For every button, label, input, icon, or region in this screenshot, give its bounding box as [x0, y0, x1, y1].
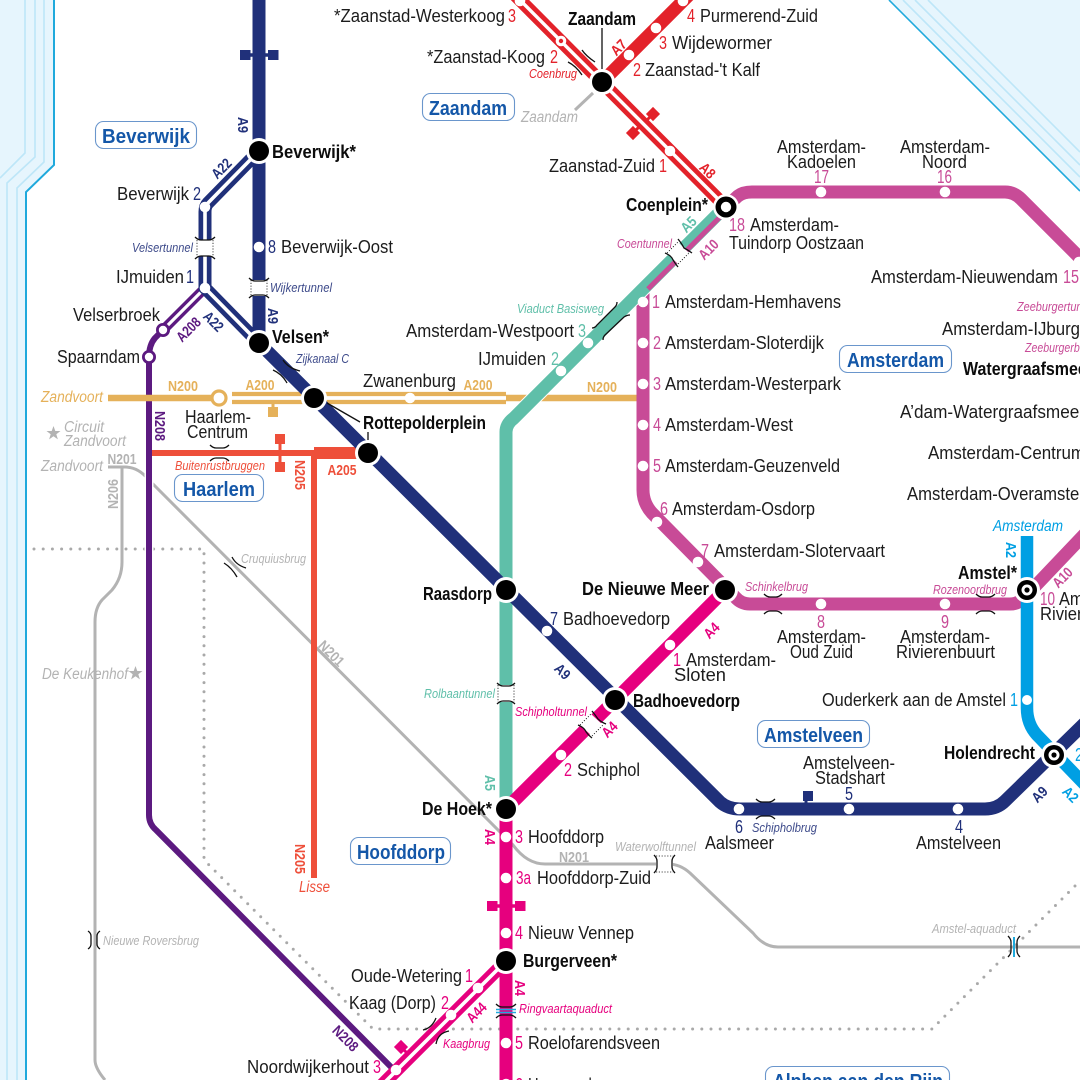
Cruquiusbrug: [224, 557, 246, 577]
structure and destination labels: Schipholtunnel: [515, 705, 588, 719]
aquaduct water lines: [496, 937, 1014, 1012]
junction labels: Beverwijk*: [272, 142, 356, 162]
road number labels: N205: [291, 460, 307, 490]
road number labels: A9: [1029, 784, 1051, 806]
structure and destination labels: Circuit: [64, 419, 105, 436]
exit numbers pink: 8: [817, 612, 825, 632]
A44 stations: [391, 983, 483, 1075]
exit numbers green and blue: 2: [551, 349, 559, 369]
structure and destination labels: Wijkertunnel: [270, 281, 333, 295]
road number labels: A4: [481, 829, 497, 845]
road number labels: A9: [264, 308, 280, 324]
exit numbers magenta: 3a: [516, 868, 532, 888]
exit names: Amsterdam-Hemhavens: [665, 292, 841, 312]
leader lines: [327, 28, 602, 443]
junction labels: Holendrecht: [944, 743, 1035, 763]
exit names: *Zaanstad-Westerkoog: [334, 6, 505, 26]
structure and destination labels: Viaduct Basisweg: [517, 302, 604, 316]
city: Hoofddorp: Hoofddorp: [357, 841, 445, 864]
structure and destination labels: Coentunnel: [617, 237, 673, 251]
exit names: Kadoelen: [787, 152, 856, 172]
junction Rottepolderplein: [355, 440, 381, 466]
road number labels: A9: [234, 117, 250, 133]
exit names: IJmuiden: [116, 267, 184, 287]
road number labels: A10: [1050, 565, 1077, 592]
road number labels: N200: [168, 379, 198, 395]
exit numbers pink: 4: [653, 415, 661, 435]
road N201: [108, 467, 1080, 947]
exit names: Amsterdam-Nieuwendam: [871, 267, 1058, 287]
city: Alphen aan den Rijn: [766, 1066, 950, 1080]
exit names: Haarlem-: [185, 407, 251, 427]
road number labels: N208: [329, 1023, 361, 1055]
exit names: Amsterdam-: [900, 137, 990, 157]
road A7 red: [602, 0, 690, 82]
road number labels: A5: [678, 214, 700, 236]
exit names: Tuindorp Oostzaan: [729, 233, 864, 253]
structure and destination labels: Waterwolftunnel: [615, 840, 697, 854]
Waterwolftunnel: [654, 855, 675, 873]
exit numbers pink: 1: [652, 292, 660, 312]
structure and destination labels: Rolbaantunnel: [424, 687, 496, 701]
Zijkanaal C: [273, 360, 300, 383]
exit numbers magenta: 3: [515, 827, 523, 847]
exit names: Amsterdam-West: [665, 415, 793, 435]
structure and destination labels: Zaandam: [520, 109, 578, 126]
road number labels: N201: [108, 452, 136, 468]
structure and destination labels: Buitenrustbruggen: [175, 459, 265, 473]
exit names: Amsterdam-: [777, 137, 866, 157]
structure and destination labels: Zandvoort: [40, 458, 104, 475]
structure and destination labels: Amstel-aquaduct: [931, 922, 1016, 936]
city: Amstelveen: Amstelveen: [764, 724, 863, 747]
road number labels: N201: [559, 850, 589, 866]
exit numbers red: 3: [659, 33, 667, 53]
exit numbers magenta: 1: [465, 966, 473, 986]
Kaagbrug: [423, 1018, 449, 1044]
exit names: Badhoevedorp: [563, 609, 670, 629]
Rolbaantunnel: [497, 683, 515, 704]
exit numbers red: 4: [687, 6, 695, 26]
exit numbers red: [508, 6, 695, 176]
structure and destination labels: Zijkanaal C: [295, 352, 350, 366]
junction Badhoevedorp: [602, 687, 628, 713]
road number labels: A2: [1002, 542, 1018, 558]
exit numbers pink: 7: [701, 541, 709, 561]
exit numbers red: 3: [508, 6, 516, 26]
Ringvaartaquaduct: [496, 1004, 516, 1018]
road number labels: N201: [315, 638, 347, 670]
road number labels: A205: [328, 463, 356, 479]
exit names: Amsterdam-Slotervaart: [714, 541, 885, 561]
exit names: Noordwijkerhout: [247, 1057, 369, 1077]
exit names: Amstelveen: [916, 833, 1001, 853]
exit names: Amsterdam-Sloterdijk: [665, 333, 825, 353]
city name boxes: [96, 94, 952, 1080]
Schinkelbrug: [764, 594, 782, 614]
road A9 navy: [240, 0, 1080, 809]
exit names: Spaarndam: [57, 347, 140, 367]
road N205 / A205 orange-red: [152, 434, 368, 878]
exit names: Hoofddorp-Zuid: [537, 868, 651, 888]
exit numbers magenta: 3: [373, 1057, 381, 1077]
junction labels: Burgerveen*: [523, 951, 617, 971]
exit numbers navy: 6: [735, 817, 743, 837]
exit names: Sloten: [674, 665, 726, 685]
junction labels: Coenplein*: [626, 195, 708, 215]
road number labels: A44: [464, 1000, 491, 1027]
exit numbers navy: 5: [845, 784, 853, 804]
junction labels: Velsen*: [272, 327, 329, 347]
junction labels: De Hoek*: [422, 799, 492, 819]
N200 stations: [212, 391, 415, 405]
purple ring stations: [143, 324, 169, 363]
exit names: Oude-Wetering: [351, 966, 462, 986]
exit numbers navy: 4: [955, 817, 963, 837]
junction labels: Zaandam: [568, 9, 636, 29]
exit numbers navy: 1: [186, 267, 194, 287]
exit numbers navy: [186, 184, 963, 837]
exit names: Roelofarendsveen: [528, 1033, 660, 1053]
exit names: Nieuw Vennep: [528, 923, 634, 943]
road A5 green: [506, 206, 728, 810]
bridges: [88, 50, 1020, 1044]
exit numbers pink: 10: [1040, 589, 1055, 609]
Nieuwe Roversbrug: [88, 931, 100, 949]
Schipholtunnel: [578, 711, 606, 738]
Amstel aquaduct: [1008, 936, 1020, 957]
junction Velsen south: [301, 385, 327, 411]
road number labels: N206: [106, 479, 122, 509]
structure and destination labels: Cruquiusbrug: [241, 552, 306, 566]
city: Beverwijk: Beverwijk: [102, 125, 191, 148]
junction Amstel: [1014, 577, 1040, 603]
Coentunnel: [665, 239, 692, 267]
road number labels: A8: [696, 160, 718, 182]
exit numbers pink: [652, 167, 1079, 632]
junction Burgerveen: [493, 948, 519, 974]
road number labels: A7: [608, 37, 630, 59]
exit numbers magenta: 1: [673, 650, 681, 670]
exit numbers green and blue: 3: [578, 321, 586, 341]
junction Coenplein: [713, 194, 739, 220]
water: North Sea, left: [0, 0, 54, 1080]
Zaandam gray stub: [575, 93, 593, 110]
junction Zaandam: [589, 69, 615, 95]
structure and destination labels: De Keukenhof: [42, 666, 129, 683]
road A2 blue: [1027, 536, 1080, 790]
A5 stations: [556, 338, 593, 376]
exit names: Velserbroek: [73, 305, 161, 325]
exit names: Amsterdam-Geuzenveld: [665, 456, 840, 476]
structure and destination labels: Velsertunnel: [132, 241, 194, 255]
dotted boundary lines: [34, 549, 1080, 1029]
exit names: Amsterdam-Westerpark: [665, 374, 842, 394]
Rozenoordbrug: [976, 594, 995, 614]
junction labels: De Nieuwe Meer: [582, 579, 709, 599]
Buitenrustbruggen: [210, 445, 229, 461]
exit names: Beverwijk-Oost: [281, 237, 393, 257]
road number labels: A208: [174, 315, 205, 346]
exit numbers pink: 18: [729, 215, 745, 235]
exit numbers magenta: 5: [515, 1033, 523, 1053]
road number labels: A4: [599, 719, 621, 741]
road A44 double line: [380, 966, 501, 1080]
structure and destination labels: Amsterdam: [992, 518, 1063, 535]
junction labels: Badhoevedorp: [633, 691, 740, 711]
junction Raasdorp: [493, 577, 519, 603]
exit names: Amsterdam-: [777, 627, 866, 647]
exit names: Beverwijk: [117, 184, 190, 204]
A5 exit names: IJmuiden: [478, 349, 546, 369]
road number labels: A4: [701, 620, 723, 642]
icon: star Circuit Zandvoort: [46, 426, 60, 439]
A4 stations: [501, 640, 675, 1080]
exit names: Purmerend-Zuid: [700, 6, 818, 26]
exit names: Amsterdam-Osdorp: [672, 499, 815, 519]
structure and destination labels: Schinkelbrug: [745, 580, 808, 594]
structure and destination labels: Zandvoort: [40, 389, 104, 406]
exit numbers red: 1: [659, 156, 667, 176]
exit names: Aalsmeer: [705, 833, 774, 853]
Wijkertunnel: [249, 278, 269, 298]
exit names: Amsterdam-: [750, 215, 839, 235]
road N200 / A200 gold: [108, 394, 637, 417]
A10 stations: [638, 187, 1080, 609]
exit numbers magenta: [373, 650, 681, 1080]
exit names: Noord: [922, 152, 967, 172]
exit names: Amsterdam-: [900, 627, 990, 647]
exit numbers pink: 5: [653, 456, 661, 476]
junction Beverwijk: [246, 138, 272, 164]
road number labels: A5: [481, 775, 497, 791]
road A4 magenta: [487, 590, 725, 1080]
road A8 red double line: [514, 0, 726, 207]
junction labels: [272, 9, 1080, 971]
exit names: Amsterdam-: [686, 650, 776, 670]
Velsertunnel: [195, 237, 215, 259]
exit numbers red: 2: [633, 60, 641, 80]
junctions: [246, 69, 1067, 974]
Viaduct Basisweg: [592, 302, 630, 340]
structure and destination labels: Coenbrug: [529, 67, 577, 81]
exit numbers pink: 16: [937, 167, 952, 187]
exit names: Amstelveen-: [803, 753, 895, 773]
A9 stations: [254, 242, 963, 814]
Coenbrug: [568, 50, 595, 75]
junction De Nieuwe Meer: [712, 577, 738, 603]
exit names: Wijdewormer: [672, 33, 772, 53]
exit numbers green and blue: 1: [1010, 690, 1018, 710]
exit names: Zaanstad-'t Kalf: [645, 60, 761, 80]
exit numbers pink: 9: [941, 612, 949, 632]
exit numbers green and blue: [551, 321, 1080, 765]
road number labels: A10: [696, 237, 723, 264]
exit numbers navy: 2: [193, 184, 201, 204]
exit numbers navy: 8: [268, 237, 276, 257]
structure and destination labels: Zandvoort: [63, 433, 127, 450]
road number labels: N208: [151, 411, 167, 441]
A2 station: [1022, 695, 1032, 705]
exit names: Oud Zuid: [790, 642, 853, 662]
structure and destination labels: Rozenoordbrug: [933, 583, 1007, 597]
road number labels: A4: [511, 980, 527, 996]
exit numbers magenta: 2: [564, 760, 572, 780]
exit names: Rivierenbuurt: [896, 642, 995, 662]
exit numbers pink: 6: [660, 499, 668, 519]
exit names: Centrum: [187, 422, 248, 442]
structure and destination labels: Schipholbrug: [752, 821, 817, 835]
exit names: Stadshart: [815, 768, 885, 788]
exit numbers navy: 7: [550, 609, 558, 629]
exit names: Zwanenburg: [363, 371, 456, 391]
A22 stations: [200, 202, 210, 293]
icon: star De Keukenhof: [129, 666, 142, 679]
junction labels: Amstel*: [958, 563, 1017, 583]
tunnels: [195, 237, 692, 873]
city: Haarlem: Haarlem: [183, 478, 255, 501]
junction Holendrecht: [1041, 742, 1067, 768]
exit numbers pink: 17: [814, 167, 829, 187]
road number labels: A22: [209, 156, 236, 183]
structure and destination labels: Nieuwe Roversbrug: [103, 934, 199, 948]
road number labels: A200: [246, 378, 274, 394]
road number labels: N205: [291, 844, 307, 874]
junction Velsen: [246, 330, 272, 356]
A5 exit names: [406, 321, 574, 369]
exit names: Ouderkerk aan de Amstel: [822, 690, 1006, 710]
A5 exit names: Amsterdam-Westpoort: [406, 321, 574, 341]
structure and destination labels: Lisse: [299, 879, 330, 896]
exit names: Zaanstad-Zuid: [549, 156, 655, 176]
road N208 / A208 purple: [149, 288, 392, 1068]
structure and destination labels: Ringvaartaquaduct: [519, 1002, 612, 1016]
exit names: Hoofddorp: [528, 827, 604, 847]
road A10 pink: [643, 192, 1080, 604]
exit numbers pink: 2: [653, 333, 661, 353]
exit names: Schiphol: [577, 760, 640, 780]
road N206: [95, 467, 122, 1080]
junction labels: Raasdorp: [423, 584, 492, 604]
road number labels: A9: [551, 661, 573, 683]
Schipholbrug: [756, 799, 775, 819]
junction De Hoek: [493, 796, 519, 822]
city: Zaandam: Zaandam: [429, 97, 507, 120]
exit names: *Zaanstad-Koog: [427, 47, 545, 67]
water: IJmeer, top right: [889, 0, 1080, 191]
city: Amsterdam: Amsterdam: [847, 349, 944, 372]
A7 and A8 stations: [515, 0, 688, 156]
road number labels: A200: [464, 378, 492, 394]
exit numbers red: 2: [550, 47, 558, 67]
road number labels: N200: [587, 380, 617, 396]
road number labels: A22: [199, 309, 226, 336]
exit numbers magenta: 4: [515, 923, 523, 943]
junction labels: Rottepolderplein: [363, 413, 486, 433]
exit numbers pink: 3: [653, 374, 661, 394]
road A22 double line: [205, 156, 254, 338]
exit numbers magenta: 2: [441, 993, 449, 1013]
exit names: Kaag (Dorp): [349, 993, 436, 1013]
structure and destination labels: Kaagbrug: [443, 1037, 490, 1051]
